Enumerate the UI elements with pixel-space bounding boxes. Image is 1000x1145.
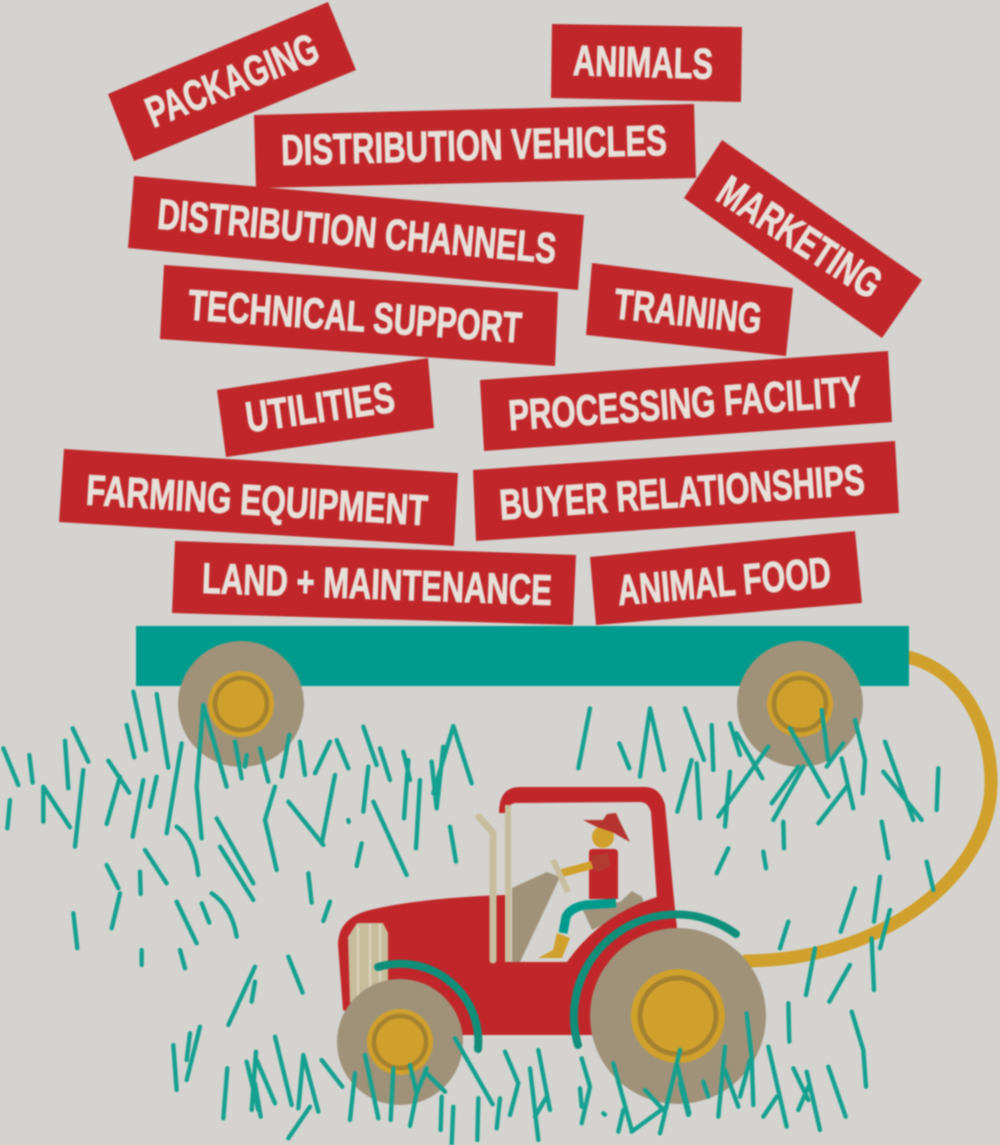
label: land and maintenance [172,541,576,625]
trailer right wheel [737,641,863,767]
label: marketing [684,140,922,338]
label: buyer relationships [473,441,899,541]
label: processing facility [480,351,892,451]
label: utilities: UTILITIES [243,374,398,442]
trailer [136,626,909,767]
farmer torso [589,849,618,899]
grass: lower left field [142,950,453,1145]
cab pillar [505,805,511,962]
front wheel [337,979,463,1105]
grille [348,923,388,1003]
label: farming equipment [59,449,458,546]
label: farming equipment: FARMING EQUIPMENT [85,467,429,535]
steering wheel [553,860,568,892]
label: distribution channels [128,176,584,290]
label: utilities [217,358,434,457]
farmer head [592,826,614,848]
label: training: TRAINING [612,280,764,344]
tractor body [338,892,677,1035]
labels: stacked cost items [59,2,922,625]
label: distribution channels: DISTRIBUTION CHANNELS [156,191,558,273]
label: land and maintenance: LAND + MAINTENANCE [201,555,553,615]
tractor [337,787,766,1105]
label: technical support: TECHNICAL SUPPORT [187,281,523,353]
label: packaging [108,2,356,161]
farmer sleeve [592,853,610,872]
label: animal food: ANIMAL FOOD [615,549,833,615]
grass: lower middle field [455,1038,689,1140]
trailer left wheel [178,641,304,767]
driver seat [583,891,645,930]
farmer leg [563,903,616,933]
front mudguard [378,964,478,1049]
label: processing facility: PROCESSING FACILITY [507,368,863,440]
label: animals [551,24,742,102]
label: animals: ANIMALS [572,37,714,89]
farmer [538,813,630,958]
rear mudguard [574,914,736,1045]
label: marketing: MARKETING [708,167,891,309]
rear wheel [590,928,766,1104]
label: technical support [160,265,558,366]
grass [3,692,938,1145]
grass: upper right field [578,708,938,1002]
farmer boot [538,933,570,958]
hose connecting trailer and tractor [743,657,991,961]
cab roof [499,787,675,910]
exhaust pipe [479,817,493,960]
farmer arm [562,865,592,873]
label: distribution vehicles [254,104,696,188]
trailer bed [136,626,909,686]
label: distribution vehicles: DISTRIBUTION VEHICLES [280,117,668,175]
label: animal food [590,531,862,625]
label: training [586,263,793,356]
label: buyer relationships: BUYER RELATIONSHIPS [498,456,866,530]
grass: upper left field [3,692,472,948]
steering column [512,872,560,962]
grass: lower right field [680,1003,866,1130]
farmer hat [583,813,630,842]
